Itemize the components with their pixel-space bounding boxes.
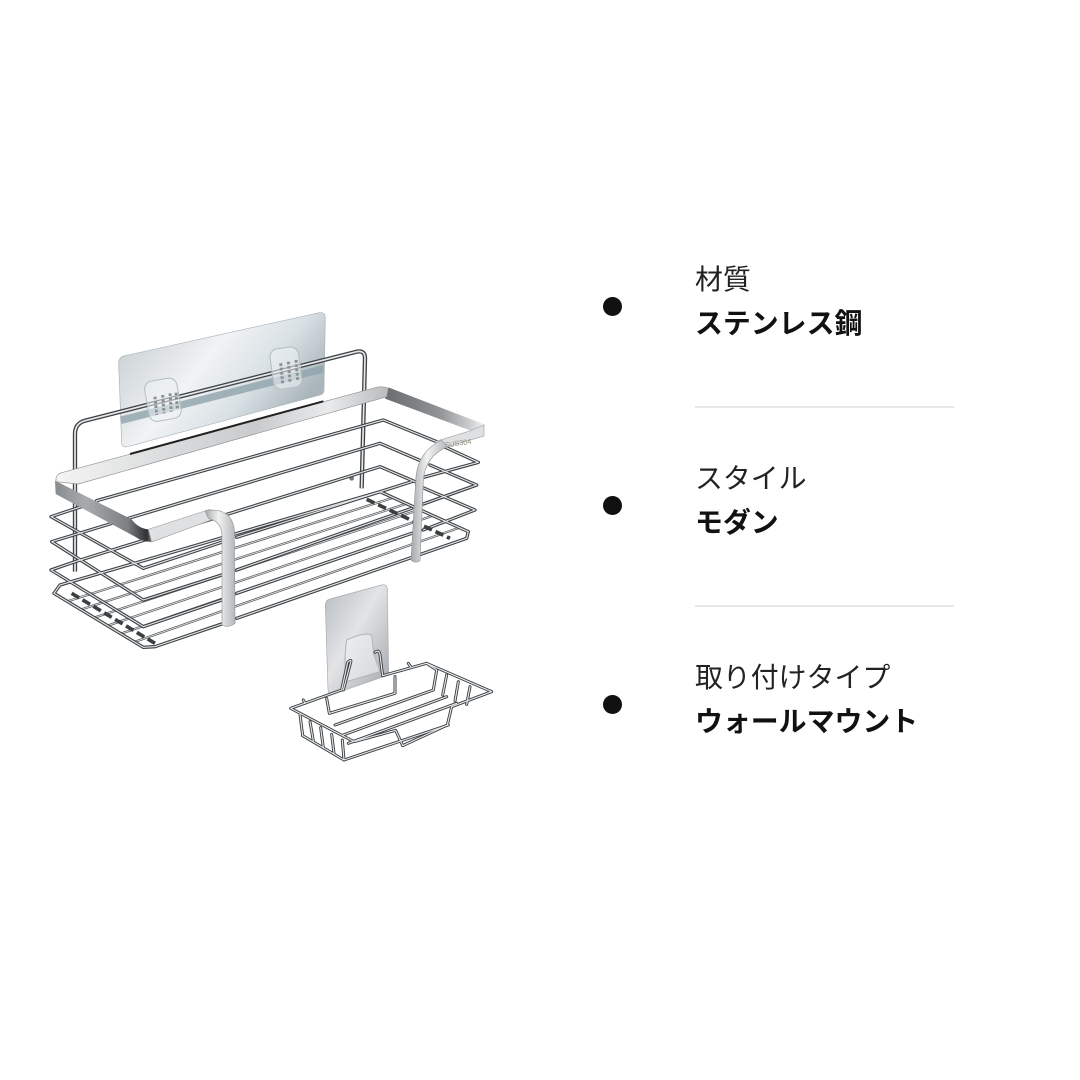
rim dark inner face: left — [55, 481, 152, 542]
dish wires — [291, 651, 492, 760]
product: small soap dish — [291, 585, 492, 760]
front bracket — [205, 510, 235, 626]
spec: material — [603, 264, 862, 339]
rim dark inner face: right — [385, 387, 483, 431]
product: large stainless shower basket — [51, 313, 484, 647]
label: スタイル — [695, 463, 807, 494]
bullet — [603, 496, 622, 515]
hook strip reflection — [120, 365, 323, 424]
basket wire loops — [51, 420, 478, 647]
adhesive wall plate — [119, 313, 325, 447]
label: 材質 — [695, 264, 751, 295]
adhesive hook left — [143, 377, 183, 423]
value: モダン — [695, 507, 779, 538]
bullet — [603, 695, 622, 714]
text: engraved SUS304: SUS304 — [444, 437, 472, 450]
spec: style — [603, 463, 807, 538]
adhesive hook right — [269, 346, 303, 390]
rim front section — [148, 425, 484, 542]
end cross bars — [72, 499, 450, 643]
rear bracket — [411, 440, 447, 562]
wall bolt — [349, 476, 354, 481]
value: ウォールマウント — [695, 706, 918, 737]
bullet — [603, 297, 622, 316]
value: ステンレス鋼 — [695, 308, 862, 339]
basket floor slats — [67, 498, 459, 642]
adhesive wall plate — [325, 585, 389, 693]
rim metal band — [56, 387, 388, 484]
label: 取り付けタイプ — [695, 662, 890, 693]
spec: mounting type — [603, 662, 918, 737]
adhesive hook — [345, 634, 380, 682]
back hanging wire — [75, 351, 365, 572]
